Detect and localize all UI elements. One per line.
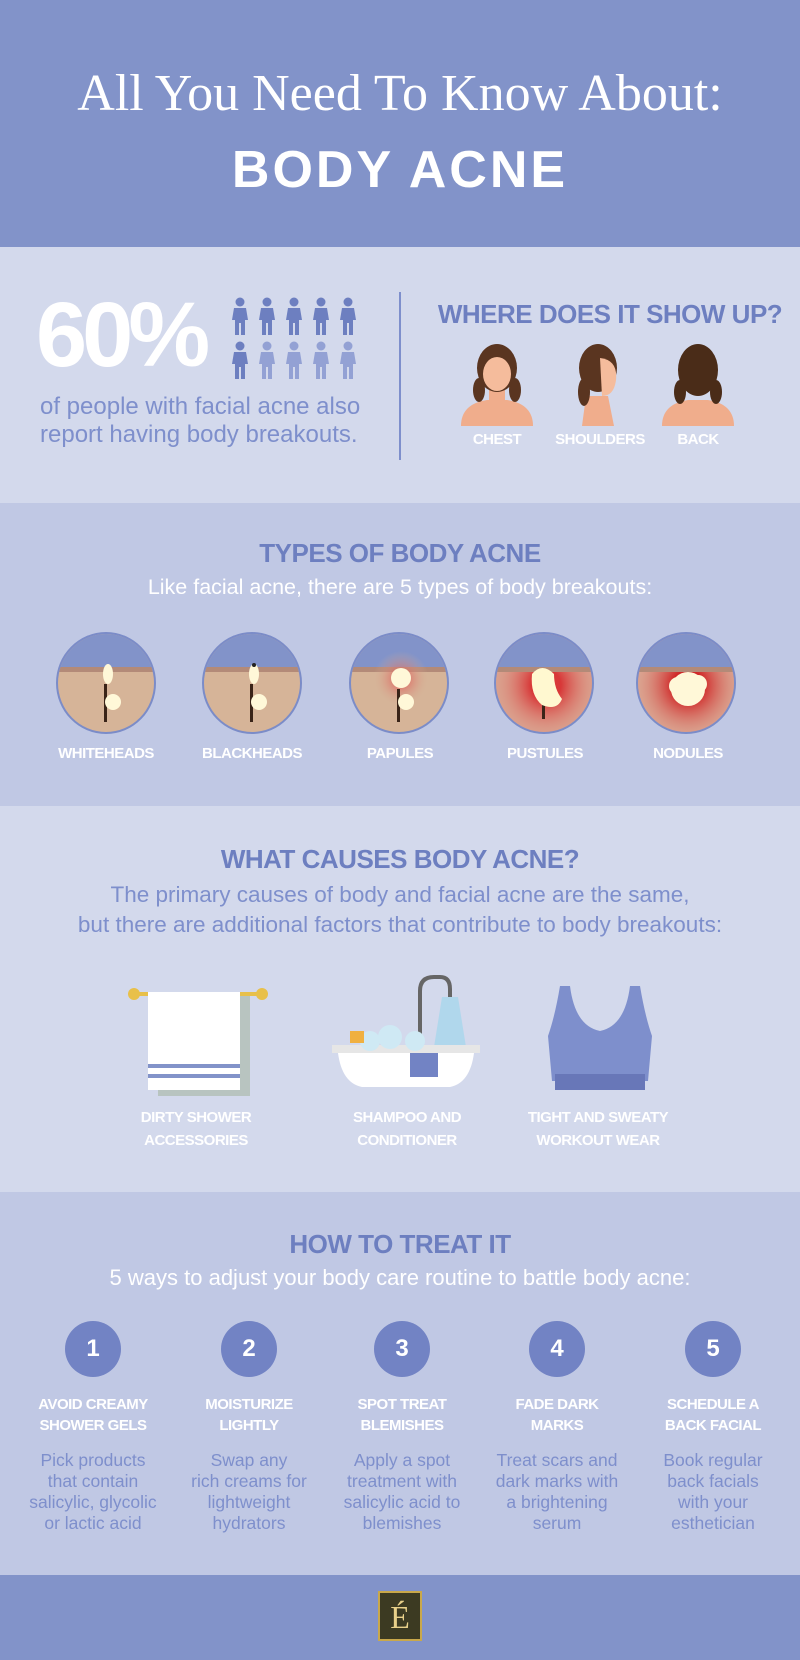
step 3: salicylic acid to bbox=[344, 1492, 460, 1512]
icon: chest bbox=[461, 344, 533, 426]
step 1: or lactic acid bbox=[44, 1513, 142, 1533]
step 4: a brightening bbox=[506, 1492, 608, 1512]
label: back: BACK bbox=[677, 431, 719, 448]
step 3: treatment with bbox=[347, 1471, 457, 1491]
step 2: lightweight bbox=[208, 1492, 290, 1512]
panel: causes bbox=[0, 806, 800, 1192]
step 1 bbox=[29, 1321, 157, 1533]
icon: nodule bbox=[636, 632, 736, 734]
step 4: serum bbox=[533, 1513, 581, 1533]
labels: SHAMPOO AND bbox=[353, 1109, 461, 1126]
labels: WHITEHEADS bbox=[58, 745, 154, 762]
step 4: dark marks with bbox=[496, 1471, 618, 1491]
label: shoulders: SHOULDERS bbox=[555, 431, 645, 448]
step 5: SCHEDULE A bbox=[667, 1396, 759, 1413]
icon: pustule bbox=[494, 632, 594, 734]
labels: DIRTY SHOWER bbox=[141, 1109, 251, 1126]
labels bbox=[141, 1109, 668, 1149]
labels: NODULES bbox=[653, 745, 723, 762]
step 1: salicylic, glycolic bbox=[29, 1492, 157, 1512]
header bbox=[0, 0, 800, 247]
step 5: with your bbox=[678, 1492, 748, 1512]
step 3: blemishes bbox=[363, 1513, 441, 1533]
footer bbox=[0, 1575, 800, 1660]
step 5: back facials bbox=[667, 1471, 759, 1491]
step 5: BACK FACIAL bbox=[665, 1417, 761, 1434]
step 2: rich creams for bbox=[191, 1471, 307, 1491]
step 1: AVOID CREAMY bbox=[38, 1396, 148, 1413]
labels: CONDITIONER bbox=[357, 1132, 457, 1149]
step 4: FADE DARK bbox=[515, 1396, 598, 1413]
step 1: SHOWER GELS bbox=[39, 1417, 146, 1434]
label: chest: CHEST bbox=[473, 431, 521, 448]
title line 2: BODY ACNE bbox=[232, 141, 568, 199]
icon: towel bbox=[128, 988, 268, 1096]
divider bbox=[399, 292, 401, 460]
step 3 bbox=[344, 1321, 460, 1533]
labels: BLACKHEADS bbox=[202, 745, 302, 762]
step 3: Apply a spot bbox=[354, 1450, 450, 1470]
icon: blackhead bbox=[202, 632, 302, 734]
labels: PAPULES bbox=[367, 745, 433, 762]
step 4: 4 bbox=[550, 1335, 564, 1362]
subtitle: Like facial acne, there are 5 types of body breakouts: bbox=[148, 575, 652, 599]
step 2: MOISTURIZE bbox=[205, 1396, 293, 1413]
icon: people grid bbox=[232, 298, 356, 379]
step 2: Swap any bbox=[211, 1450, 287, 1470]
step 3: BLEMISHES bbox=[360, 1417, 444, 1434]
stat description: of people with facial acne also bbox=[40, 393, 360, 420]
subtitle: The primary causes of body and facial acne are the same, bbox=[110, 882, 690, 907]
step 5 bbox=[663, 1321, 763, 1533]
panel: types of body acne bbox=[0, 503, 800, 806]
step 1: 1 bbox=[86, 1335, 100, 1362]
labels: TIGHT AND SWEATY bbox=[528, 1109, 668, 1126]
icon: sports bra bbox=[548, 986, 652, 1090]
step 4 bbox=[496, 1321, 618, 1533]
stat description bbox=[40, 393, 360, 448]
step 2: hydrators bbox=[213, 1513, 285, 1533]
heading: HOW TO TREAT IT bbox=[289, 1229, 511, 1259]
panel: how to treat it bbox=[0, 1192, 800, 1575]
heading: WHAT CAUSES BODY ACNE? bbox=[221, 844, 579, 874]
icon: whitehead bbox=[56, 632, 156, 734]
step 5: esthetician bbox=[671, 1513, 755, 1533]
labels bbox=[58, 745, 723, 762]
step 1: Pick products bbox=[40, 1450, 146, 1470]
subtitle: 5 ways to adjust your body care routine to battle body acne: bbox=[110, 1265, 690, 1290]
subtitle: but there are additional factors that contribute to body breakouts: bbox=[78, 912, 722, 937]
step 4: MARKS bbox=[531, 1417, 583, 1434]
labels: WORKOUT WEAR bbox=[536, 1132, 660, 1149]
icon: shoulders bbox=[578, 344, 617, 426]
step 5: 5 bbox=[706, 1335, 720, 1362]
step 1: that contain bbox=[48, 1471, 138, 1491]
step 2 bbox=[191, 1321, 307, 1533]
big percentage: 60% bbox=[36, 284, 205, 386]
step 2: 2 bbox=[242, 1335, 256, 1362]
logo: É bbox=[390, 1599, 410, 1635]
subtitle bbox=[78, 882, 722, 937]
heading: where does it show up: WHERE DOES IT SHOW UP? bbox=[438, 299, 782, 329]
step 4: Treat scars and bbox=[497, 1450, 617, 1470]
panel: statistics bbox=[0, 247, 800, 503]
labels: PUSTULES bbox=[507, 745, 583, 762]
step 3: SPOT TREAT bbox=[358, 1396, 446, 1413]
labels: ACCESSORIES bbox=[144, 1132, 248, 1149]
step 2: LIGHTLY bbox=[219, 1417, 279, 1434]
icon: back bbox=[662, 344, 734, 426]
icon: papule bbox=[349, 632, 449, 734]
step 3: 3 bbox=[395, 1335, 409, 1362]
title line 1: All You Need To Know About: bbox=[77, 65, 723, 122]
stat description: report having body breakouts. bbox=[40, 421, 358, 448]
step 5: Book regular bbox=[663, 1450, 763, 1470]
heading: TYPES OF BODY ACNE bbox=[259, 538, 541, 568]
icon: bathtub bbox=[332, 975, 480, 1087]
logo bbox=[378, 1591, 422, 1641]
